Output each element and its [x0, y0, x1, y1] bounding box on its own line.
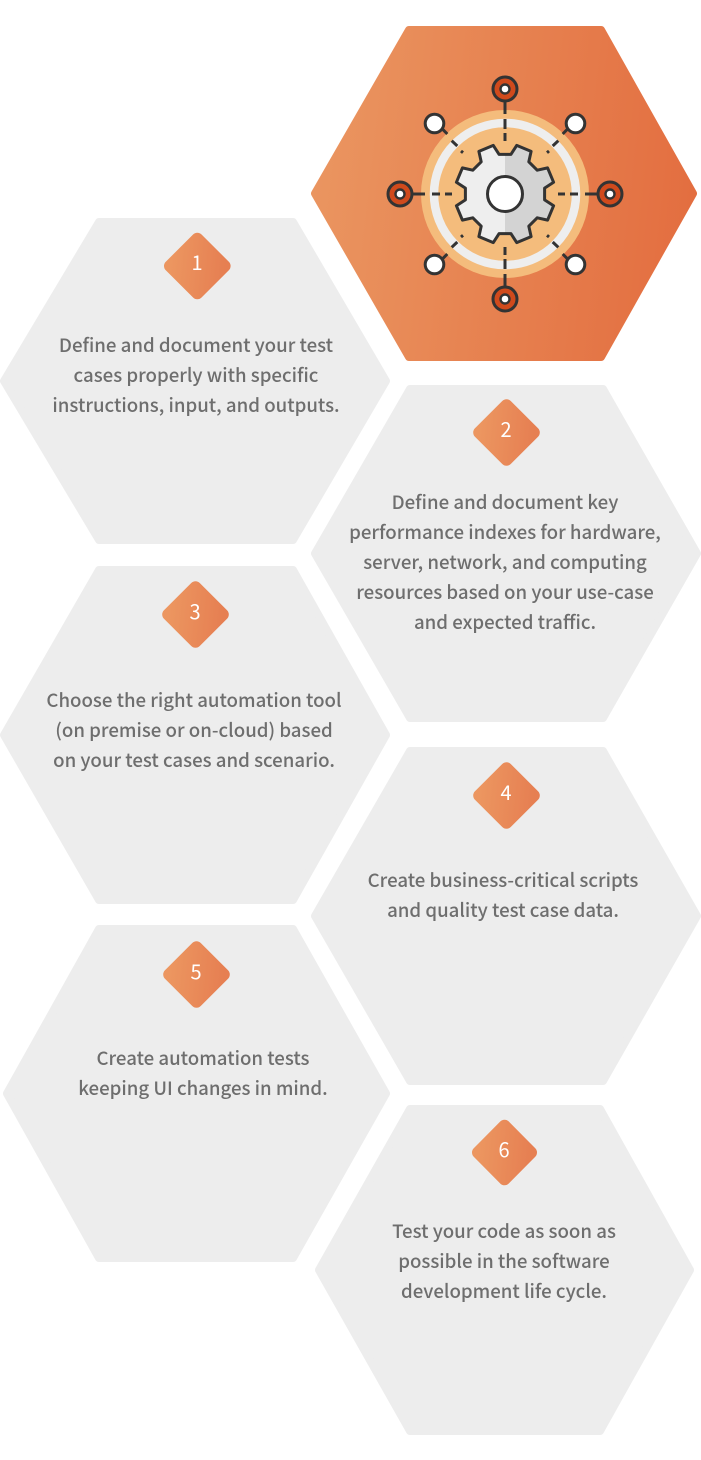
- panel: step 1: [4, 222, 386, 540]
- text: step 2 description: performance indexes for hardware,: [349, 518, 661, 545]
- icon: number badge 5: [169, 947, 224, 1002]
- text: step 2 description: resources based on your use-case: [356, 578, 654, 605]
- panel: step 6: [319, 1109, 690, 1431]
- text: step 6 description: Test your code as soon as: [392, 1217, 616, 1244]
- text: step 6 description: development life cycle.: [401, 1277, 607, 1304]
- text: step 6 description: possible in the software: [398, 1247, 610, 1274]
- panel: hero hexagon: [315, 30, 693, 357]
- icon: number badge 3: [168, 587, 223, 642]
- panel: step 4: [315, 751, 697, 1081]
- text: step 1 description: instructions, input, and outputs.: [52, 391, 340, 418]
- text: step 4 description: Create business-critical scripts: [368, 866, 638, 893]
- text: step 2 description: and expected traffic.: [414, 608, 596, 635]
- icon: number badge 6: [478, 1126, 531, 1179]
- text: step 2 description: server, network, and computing: [363, 548, 647, 575]
- icon: number badge 3: 3: [189, 596, 201, 625]
- text: step 2 description: Define and document key: [392, 488, 618, 515]
- icon: number badge 2: 2: [500, 414, 512, 443]
- icon: number badge 4: 4: [500, 777, 512, 806]
- text: step 3 description: on your test cases and scenario.: [53, 746, 335, 773]
- text: step 1 description: Define and document your test: [59, 331, 334, 358]
- text: step 4 description: and quality test case data.: [387, 896, 619, 923]
- text: step 5 description: Create automation tests: [96, 1044, 310, 1071]
- text: step 1 description: cases properly with specific: [74, 361, 319, 388]
- panel: step 2: [315, 389, 697, 718]
- panel: step 3: [4, 570, 386, 900]
- icon: number badge 2: [479, 405, 534, 460]
- panel: step 5: [7, 929, 386, 1258]
- icon: number badge 1: [170, 239, 225, 293]
- text: step 3 description: (on premise or on-cloud) based: [55, 716, 333, 743]
- icon: number badge 1: 1: [191, 247, 203, 276]
- icon: number badge 6: 6: [498, 1134, 510, 1163]
- text: step 3 description: Choose the right automation tool: [46, 686, 342, 713]
- text: step 5 description: keeping UI changes in mind.: [78, 1074, 328, 1101]
- icon: number badge 5: 5: [190, 956, 202, 985]
- icon: number badge 4: [479, 768, 534, 823]
- icon: gear network: [388, 77, 622, 311]
